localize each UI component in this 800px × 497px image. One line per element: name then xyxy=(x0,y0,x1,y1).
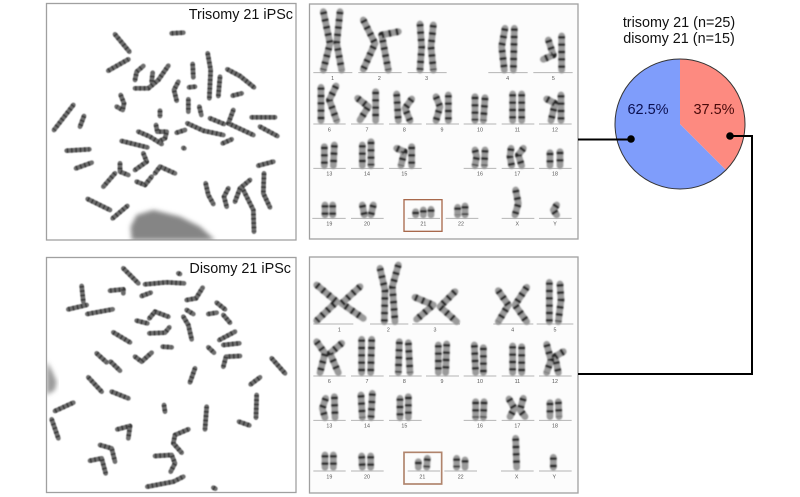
chromosome numbers: disomy 21: 14 xyxy=(364,424,370,430)
chromosome numbers: disomy 21: 3 xyxy=(434,328,437,334)
chromosome numbers: disomy 21: 12 xyxy=(552,379,558,385)
legend: sample counts xyxy=(623,15,735,47)
chromosome numbers: trisomy 21: 3 xyxy=(425,76,428,82)
pie chart: trisomy vs disomy share xyxy=(615,59,745,189)
legend: sample counts: trisomy 21 (n=25) xyxy=(623,15,735,31)
chromosome numbers: trisomy 21: 7 xyxy=(366,127,369,133)
chromosome numbers: trisomy 21: 15 xyxy=(401,172,407,178)
chromosome numbers: disomy 21: 4 xyxy=(511,328,514,334)
chromosome numbers: trisomy 21: 11 xyxy=(515,127,520,133)
chromosome numbers: disomy 21: 21 xyxy=(419,474,425,480)
chromosome numbers: disomy 21: 2 xyxy=(387,328,390,334)
chromosome numbers: disomy 21: 13 xyxy=(326,424,332,430)
chromosome numbers: disomy 21: 7 xyxy=(366,379,369,385)
chromosome numbers: disomy 21: X xyxy=(515,474,519,480)
chromosome numbers: trisomy 21: 20 xyxy=(364,222,370,228)
chromosome numbers: disomy 21: 18 xyxy=(552,424,558,430)
heading: Disomy 21 iPSc: Disomy 21 iPSc xyxy=(189,261,291,277)
chromosome numbers: trisomy 21: 6 xyxy=(328,127,331,133)
value: 62.5%: 62.5% xyxy=(627,102,669,118)
chromosome numbers: disomy 21: 10 xyxy=(477,379,483,385)
panel: trisomy 21 karyotype xyxy=(310,4,578,239)
panel: trisomy 21 metaphase spread xyxy=(46,4,296,240)
slice: trisomy 21 62.5% xyxy=(615,59,726,189)
chromosome numbers: trisomy 21 xyxy=(326,76,558,228)
chromosome numbers: trisomy 21: 8 xyxy=(403,127,406,133)
chromosome numbers: disomy 21: 15 xyxy=(401,424,407,430)
karyotype chart: trisomy 21 xyxy=(312,12,573,231)
highlight box: chromosome 21 (two copies) xyxy=(404,452,442,484)
connector: trisomy karyotype to pie xyxy=(578,135,635,143)
chromosome numbers: trisomy 21: 19 xyxy=(326,222,332,228)
chromosomes: trisomy 21 spread xyxy=(54,33,277,240)
chromosome numbers: trisomy 21: X xyxy=(516,222,520,228)
chromosome numbers: trisomy 21: 13 xyxy=(326,172,332,178)
slice: disomy 21 37.5% xyxy=(680,59,745,170)
legend: sample counts: disomy 21 (n=15) xyxy=(623,31,735,47)
panel: disomy 21 karyotype xyxy=(310,257,578,493)
karyotype chart: disomy 21 xyxy=(313,265,573,484)
chromosome numbers: trisomy 21: 10 xyxy=(477,127,483,133)
chromosome numbers: trisomy 21: 16 xyxy=(477,172,483,178)
chromosome numbers: trisomy 21: 12 xyxy=(552,127,558,133)
chromosome numbers: trisomy 21: Y xyxy=(553,222,557,228)
highlight box: chromosome 21 (three copies) xyxy=(404,200,442,231)
chromosome numbers: disomy 21: 20 xyxy=(364,474,370,480)
chromosomes: disomy 21 spread xyxy=(47,268,285,489)
chromosome numbers: trisomy 21: 21 xyxy=(420,222,426,228)
heading: Trisomy 21 iPSc: Trisomy 21 iPSc xyxy=(189,7,293,23)
connector: disomy karyotype to pie xyxy=(578,132,752,374)
chromosome numbers: trisomy 21: 1 xyxy=(331,76,334,82)
chromosome numbers: disomy 21: 1 xyxy=(338,328,341,334)
chromosome numbers: disomy 21: 5 xyxy=(554,328,557,334)
panel: disomy 21 metaphase spread xyxy=(46,258,296,492)
chromosome numbers: disomy 21: 11 xyxy=(515,379,520,385)
chromosome numbers: trisomy 21: 2 xyxy=(378,76,381,82)
chromosome numbers: trisomy 21: 14 xyxy=(364,172,370,178)
chromosome numbers: trisomy 21: 22 xyxy=(458,222,464,228)
chromosome numbers: disomy 21: 9 xyxy=(441,379,444,385)
chromosome numbers: trisomy 21: 5 xyxy=(552,76,555,82)
chromosome numbers: disomy 21 xyxy=(326,328,558,480)
chromosome numbers: trisomy 21: 9 xyxy=(441,127,444,133)
chromosome numbers: disomy 21: 16 xyxy=(477,424,483,430)
chromosome numbers: disomy 21: 8 xyxy=(403,379,406,385)
chromosome numbers: disomy 21: 6 xyxy=(328,379,331,385)
chromosome numbers: trisomy 21: 18 xyxy=(552,172,558,178)
value: 37.5%: 37.5% xyxy=(693,102,735,118)
chromosome numbers: disomy 21: 19 xyxy=(326,474,332,480)
chromosome numbers: trisomy 21: 17 xyxy=(514,172,520,178)
chromosome numbers: disomy 21: 22 xyxy=(458,474,464,480)
chromosome numbers: trisomy 21: 4 xyxy=(506,76,509,82)
chromosome numbers: disomy 21: Y xyxy=(553,474,557,480)
chromosome numbers: disomy 21: 17 xyxy=(514,424,520,430)
